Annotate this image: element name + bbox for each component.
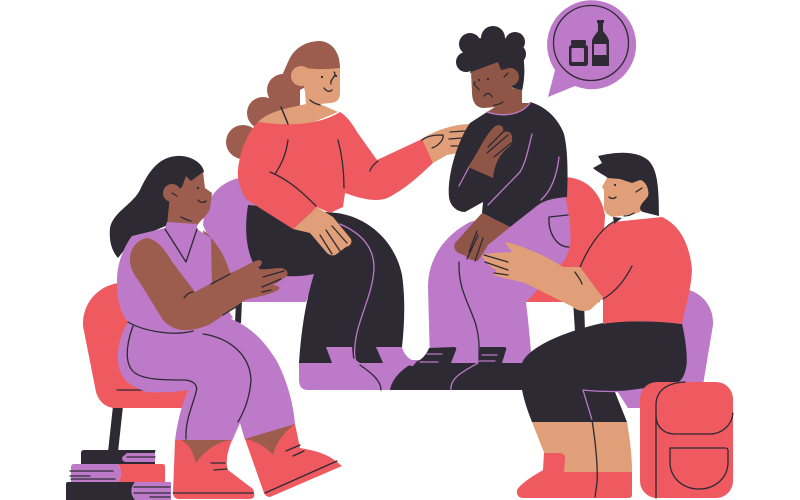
person: middle woman — [226, 41, 465, 390]
person: seated man with sweater — [390, 26, 571, 390]
right boot — [245, 424, 342, 497]
black shorts — [522, 321, 687, 422]
black trousers — [246, 205, 404, 363]
shoes — [517, 453, 632, 498]
chest hand — [468, 125, 512, 178]
trousers — [118, 316, 295, 441]
red chair: right — [518, 177, 605, 332]
left boot — [173, 440, 254, 499]
icon: jar — [569, 40, 588, 66]
stack of books — [66, 450, 171, 500]
long wavy hair — [226, 41, 340, 160]
red top — [238, 112, 433, 229]
speech bubble — [547, 0, 636, 97]
head — [633, 179, 651, 197]
purple shoes — [326, 347, 360, 363]
person: right seated man — [482, 153, 692, 498]
icon: bottle — [592, 20, 609, 66]
purple sofa: middle back and seat — [203, 177, 425, 390]
red shirt — [580, 217, 692, 324]
trousers — [428, 195, 571, 363]
head — [471, 62, 530, 115]
knee hand — [454, 213, 510, 261]
face and chest — [258, 66, 340, 128]
knee hand — [293, 207, 351, 256]
face — [163, 172, 212, 226]
person: left woman — [110, 156, 342, 499]
shoes — [390, 347, 532, 390]
arm and hand — [482, 242, 603, 311]
sweater — [449, 102, 568, 227]
backpack — [640, 382, 733, 498]
legs — [532, 422, 632, 473]
arm and hand — [130, 238, 288, 330]
black hair — [110, 156, 204, 258]
red chair: left — [83, 283, 242, 452]
purple top — [117, 222, 233, 332]
back arm — [203, 230, 230, 284]
middle woman's hand on the man's shoulder — [420, 124, 475, 163]
curly hair — [456, 26, 526, 91]
far-right purple sofa — [610, 288, 713, 408]
